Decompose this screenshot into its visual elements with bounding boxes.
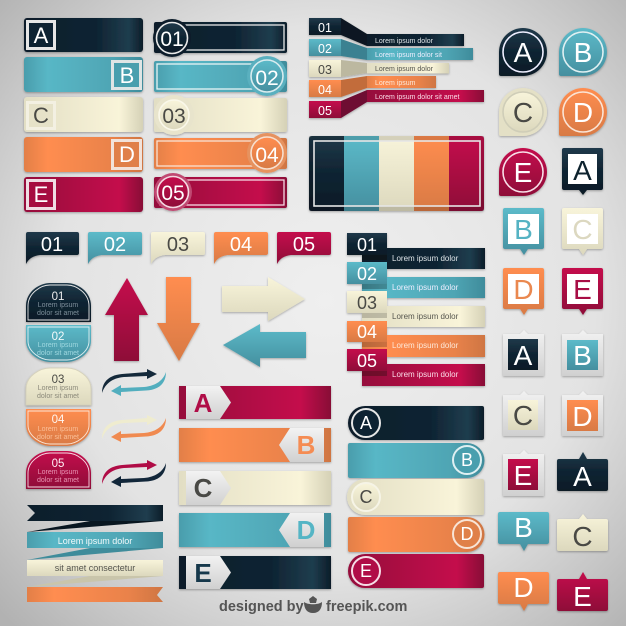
label 01: 01 bbox=[357, 235, 377, 255]
frame E bbox=[503, 450, 544, 496]
callout D: D bbox=[513, 274, 534, 305]
tab 04 bbox=[26, 409, 91, 446]
ribbon B: B bbox=[297, 430, 315, 460]
step 02 bbox=[309, 39, 473, 60]
fold: dark bbox=[27, 521, 163, 532]
step 02: 02 bbox=[318, 42, 332, 56]
strip: cream with text: sit amet consectetur bbox=[55, 563, 135, 573]
tag B: B bbox=[514, 512, 533, 543]
label 01 bbox=[347, 233, 485, 269]
panel: dome tabs bbox=[26, 283, 91, 489]
tab 05 bbox=[26, 451, 91, 489]
strip: dark bbox=[27, 505, 163, 521]
frame A: A bbox=[514, 340, 533, 371]
pill E: E bbox=[360, 561, 372, 581]
bar 02: 02 bbox=[255, 67, 279, 90]
step 01: 01 bbox=[318, 21, 332, 35]
label 05: Lorem ipsum dolor bbox=[392, 370, 459, 379]
step 04 bbox=[309, 76, 436, 97]
tab 02: dolor sit amet bbox=[37, 350, 79, 357]
step 03: Lorem ipsum dolor bbox=[375, 66, 434, 73]
label 03: 03 bbox=[357, 293, 377, 313]
callout E: E bbox=[573, 274, 592, 305]
step 04: Lorem ipsum bbox=[375, 80, 416, 87]
tab 01: dolor sit amet bbox=[37, 310, 79, 317]
tab 04: Lorem ipsum bbox=[38, 426, 78, 433]
pill D: D bbox=[460, 524, 474, 544]
tag E: E bbox=[573, 581, 592, 612]
frame D: D bbox=[572, 401, 593, 432]
tag A bbox=[557, 452, 608, 492]
label 02: Lorem ipsum dolor bbox=[392, 283, 459, 292]
icon: freepik logo bbox=[304, 596, 322, 613]
tab 03: dolor sit amet bbox=[37, 393, 79, 400]
step 02: Lorem ipsum dolor sit bbox=[375, 52, 442, 59]
panel: letter bars with square badges bbox=[24, 18, 143, 212]
label 02 bbox=[347, 262, 485, 298]
bubble 02 bbox=[88, 232, 142, 264]
panel: solid letter tags bbox=[498, 452, 608, 612]
bar 02 bbox=[154, 56, 287, 96]
panel: gray framed squares bbox=[503, 330, 603, 496]
ribbon B bbox=[179, 428, 331, 462]
callout A bbox=[562, 148, 603, 195]
ribbon C bbox=[179, 471, 331, 505]
step 01: Lorem ipsum dolor bbox=[375, 38, 434, 45]
tag D bbox=[498, 572, 549, 611]
bubble 01: 01 bbox=[41, 234, 63, 256]
bar C: C bbox=[33, 103, 49, 128]
tag E bbox=[557, 572, 608, 612]
arrow: right cream bbox=[222, 277, 305, 321]
label 04: Lorem ipsum dolor bbox=[392, 341, 459, 350]
bar 05: 05 bbox=[161, 182, 185, 205]
bar 04 bbox=[154, 133, 287, 173]
ribbon E bbox=[179, 556, 331, 589]
bar 03: 03 bbox=[162, 105, 186, 128]
bar 01: 01 bbox=[160, 28, 184, 51]
step 03: 03 bbox=[318, 63, 332, 77]
tab 01 bbox=[26, 283, 91, 322]
pin A bbox=[499, 28, 547, 76]
panel: stepped number labels top bbox=[309, 18, 484, 118]
label 04 bbox=[347, 321, 485, 357]
step 05: 05 bbox=[318, 104, 332, 118]
callout D bbox=[503, 268, 544, 315]
bubble 03: 03 bbox=[167, 234, 189, 256]
footer credit: freepik.com bbox=[326, 599, 407, 615]
tab 04: 04 bbox=[52, 414, 65, 426]
bar 01 bbox=[153, 19, 287, 57]
bar 03 bbox=[154, 95, 287, 135]
ribbon A bbox=[179, 386, 331, 419]
bar A bbox=[24, 18, 143, 52]
frame B bbox=[562, 330, 603, 376]
tab 03 bbox=[26, 368, 91, 405]
tab 05: dolor sit amet bbox=[37, 477, 79, 484]
bubble 04: 04 bbox=[230, 234, 252, 256]
panel: speech bubbles 01-05 bbox=[26, 232, 331, 264]
tab 01: 01 bbox=[52, 291, 64, 303]
arrow: up crimson bbox=[105, 278, 148, 361]
curved arrow pair: crimson and navy bbox=[102, 460, 166, 487]
strip: teal with text: Lorem ipsum dolor bbox=[58, 536, 132, 546]
tab 03: Lorem ipsum bbox=[38, 385, 78, 392]
ribbon E: E bbox=[194, 558, 212, 588]
curved arrow pair: cream and orange bbox=[102, 415, 166, 442]
tab 02 bbox=[26, 325, 91, 362]
panel: rounded bars with ring badges bbox=[347, 406, 484, 588]
ribbon A: A bbox=[194, 388, 213, 418]
tab 05: 05 bbox=[52, 458, 64, 470]
tab 01: Lorem ipsum bbox=[38, 302, 78, 309]
step 03 bbox=[309, 60, 449, 77]
pin D: D bbox=[573, 97, 593, 128]
step 05 bbox=[309, 90, 484, 118]
pin C: C bbox=[513, 97, 533, 128]
pin D bbox=[559, 88, 607, 136]
pin A: A bbox=[514, 37, 533, 68]
footer credit bbox=[219, 596, 407, 615]
strip: orange bbox=[27, 587, 163, 602]
fold: cream bbox=[27, 576, 163, 587]
label 05: 05 bbox=[357, 351, 377, 371]
callout A: A bbox=[573, 155, 592, 186]
panel: number bars with round badges bbox=[153, 19, 287, 211]
tag A: A bbox=[573, 461, 592, 492]
ribbon D: D bbox=[297, 515, 315, 545]
bar 04: 04 bbox=[255, 144, 279, 167]
arrow: down orange bbox=[157, 277, 200, 361]
pill B: B bbox=[461, 450, 473, 470]
label 01: Lorem ipsum dolor bbox=[392, 254, 459, 263]
tab 03: 03 bbox=[52, 374, 64, 386]
callout E bbox=[562, 268, 603, 315]
callout B bbox=[503, 208, 544, 255]
tag D: D bbox=[513, 572, 534, 603]
panel: folded ribbon bbox=[27, 505, 163, 602]
tag C: C bbox=[572, 521, 593, 552]
tab 02: Lorem ipsum bbox=[38, 342, 78, 349]
ribbon C: C bbox=[194, 473, 213, 503]
curved arrow pair: navy and teal bbox=[102, 369, 166, 396]
callout B: B bbox=[514, 214, 533, 245]
panel: ribbon bars with arrow tags bbox=[179, 386, 331, 589]
bar A: A bbox=[34, 23, 49, 48]
pill D bbox=[348, 517, 484, 552]
fold: teal bbox=[27, 548, 163, 560]
panel: round pin badges bbox=[499, 28, 607, 196]
footer credit: designed by bbox=[219, 599, 304, 615]
bubble 05: 05 bbox=[293, 234, 315, 256]
bar C bbox=[24, 97, 143, 132]
pin E bbox=[499, 148, 547, 196]
callout C: C bbox=[572, 214, 593, 245]
label 05 bbox=[347, 349, 485, 386]
label 03 bbox=[347, 291, 485, 327]
pill B bbox=[348, 443, 484, 478]
pin E: E bbox=[514, 157, 532, 188]
bubble 03 bbox=[151, 232, 205, 264]
frame A bbox=[503, 330, 544, 376]
tab 02: 02 bbox=[52, 331, 64, 343]
step 01 bbox=[309, 18, 464, 46]
pill E bbox=[348, 554, 484, 588]
bubble 01 bbox=[26, 232, 79, 264]
pill A bbox=[348, 406, 484, 440]
bar D: D bbox=[119, 142, 135, 167]
tab 04: dolor sit amet bbox=[37, 434, 79, 441]
bar B: B bbox=[120, 63, 134, 88]
frame C: C bbox=[513, 400, 533, 431]
pill A: A bbox=[360, 413, 372, 433]
pin C bbox=[499, 88, 547, 136]
frame E: E bbox=[514, 460, 532, 491]
panel: numbered fold labels bbox=[347, 233, 485, 386]
bar 05 bbox=[154, 173, 287, 211]
pill C: C bbox=[360, 487, 372, 507]
frame D bbox=[562, 391, 603, 436]
palette panel bbox=[309, 136, 484, 211]
pill C bbox=[347, 479, 484, 515]
ribbon D bbox=[179, 513, 331, 547]
bar B bbox=[24, 57, 143, 92]
pin B bbox=[559, 28, 607, 76]
callout C bbox=[562, 208, 603, 255]
bar E bbox=[24, 177, 143, 212]
label 03: Lorem ipsum dolor bbox=[392, 312, 459, 321]
label 04: 04 bbox=[357, 322, 377, 342]
bubble 02: 02 bbox=[104, 234, 126, 256]
bar E: E bbox=[34, 182, 48, 207]
bubble 05 bbox=[277, 232, 331, 264]
step 05: Lorem ipsum dolor sit amet bbox=[375, 94, 459, 101]
pin B: B bbox=[574, 37, 592, 68]
bar D bbox=[24, 137, 143, 172]
label 02: 02 bbox=[357, 264, 377, 284]
arrow: left teal bbox=[223, 324, 306, 367]
frame B: B bbox=[573, 340, 592, 371]
panel: square callouts with white centres bbox=[503, 148, 603, 315]
tag C bbox=[557, 514, 608, 552]
step 04: 04 bbox=[318, 83, 332, 97]
bubble 04 bbox=[214, 232, 268, 264]
frame C bbox=[503, 391, 544, 436]
tab 05: Lorem ipsum bbox=[38, 469, 78, 476]
tag B bbox=[498, 512, 549, 551]
